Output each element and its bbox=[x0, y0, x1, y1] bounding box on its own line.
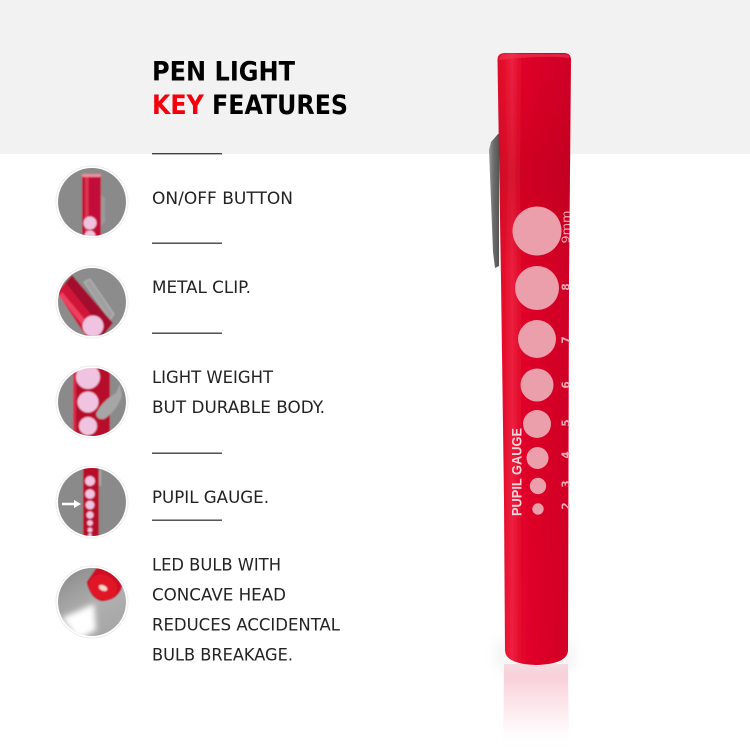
pupil gauge numbers: 3 bbox=[560, 480, 572, 488]
icon: led bulb bbox=[56, 566, 128, 640]
pupil gauge numbers: 5 bbox=[560, 419, 572, 427]
title bbox=[152, 56, 348, 121]
feature label: led bulb: BULB BREAKAGE. bbox=[152, 646, 293, 666]
feature label: led bulb: LED BULB WITH bbox=[152, 556, 281, 576]
pupil gauge numbers bbox=[560, 210, 572, 510]
pen reflection bbox=[503, 664, 569, 750]
feature label: light weight body: LIGHT WEIGHT bbox=[152, 368, 274, 388]
metal clip on pen bbox=[489, 134, 499, 268]
title: KEY FEATURES bbox=[152, 90, 348, 121]
pen shadow halo bbox=[496, 640, 574, 670]
icon: on/off button bbox=[56, 166, 128, 242]
feature label: on/off button: ON/OFF BUTTON bbox=[152, 189, 293, 209]
header band bbox=[0, 0, 750, 154]
icon: arrow bbox=[62, 500, 81, 508]
pupil gauge numbers: 6 bbox=[560, 381, 572, 389]
feature label: pupil gauge: PUPIL GAUGE. bbox=[152, 488, 269, 508]
icon: light weight body bbox=[56, 365, 128, 438]
pupil gauge numbers: 8 bbox=[560, 283, 572, 291]
feature label: led bulb: REDUCES ACCIDENTAL bbox=[152, 616, 341, 636]
pupil gauge numbers: 9mm bbox=[560, 210, 572, 244]
feature label: light weight body: BUT DURABLE BODY. bbox=[152, 398, 325, 418]
feature label: metal clip: METAL CLIP. bbox=[152, 278, 251, 298]
pupil gauge dots bbox=[512, 206, 562, 515]
pen light illustration bbox=[489, 53, 572, 665]
icon: pupil gauge with arrow bbox=[56, 466, 128, 538]
title: PEN LIGHT bbox=[152, 56, 296, 88]
pupil gauge numbers: 4 bbox=[560, 451, 572, 459]
pen body bbox=[498, 53, 571, 665]
feature label: light weight body bbox=[152, 368, 325, 418]
pupil gauge numbers: 7 bbox=[560, 336, 572, 344]
feature label: led bulb bbox=[152, 556, 341, 666]
feature label: led bulb: CONCAVE HEAD bbox=[152, 586, 286, 606]
icon: metal clip bbox=[56, 266, 128, 340]
pupil gauge numbers: 2 bbox=[560, 502, 572, 510]
pupil gauge label: PUPIL GAUGE bbox=[510, 428, 524, 516]
